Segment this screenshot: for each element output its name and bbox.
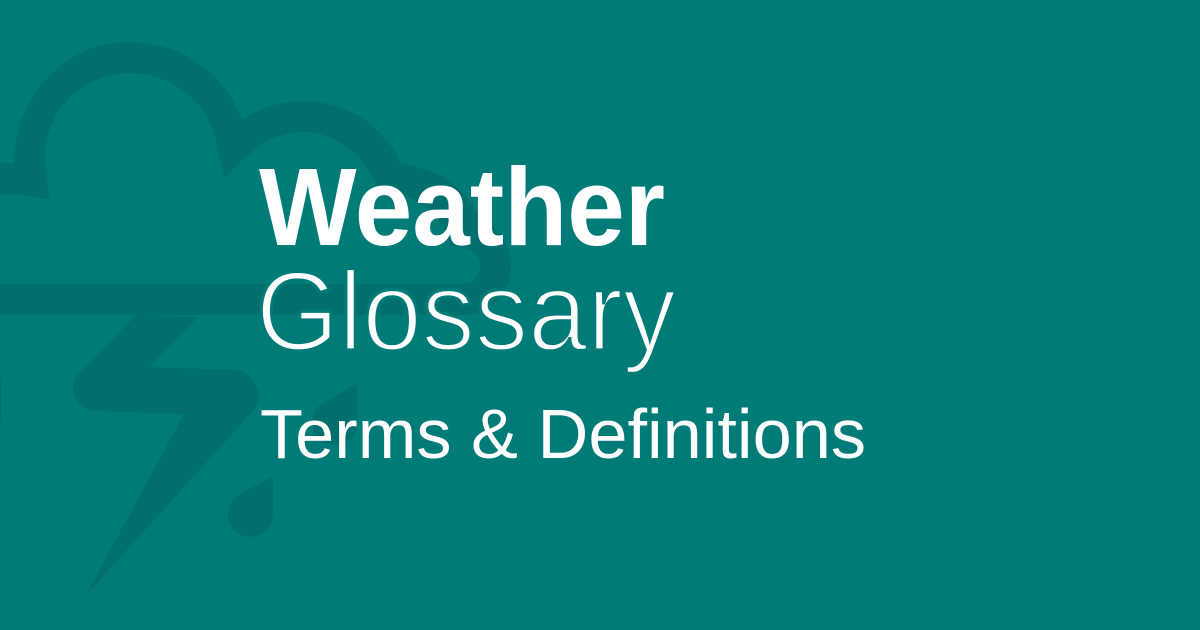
title: Glossary: Glossary xyxy=(256,249,676,374)
icon: lightning bolt xyxy=(73,315,259,595)
icon: storm cloud with lightning and rain xyxy=(0,42,511,595)
icon: rain drop at left edge xyxy=(0,379,1,422)
icon: rain drop behind text xyxy=(312,384,357,445)
title: Weather: Weather xyxy=(259,146,665,269)
icon: cloud outline xyxy=(0,42,511,315)
subtitle: Terms and Definitions: Terms & Definitions xyxy=(260,395,866,473)
icon: large rain drop xyxy=(228,476,273,537)
